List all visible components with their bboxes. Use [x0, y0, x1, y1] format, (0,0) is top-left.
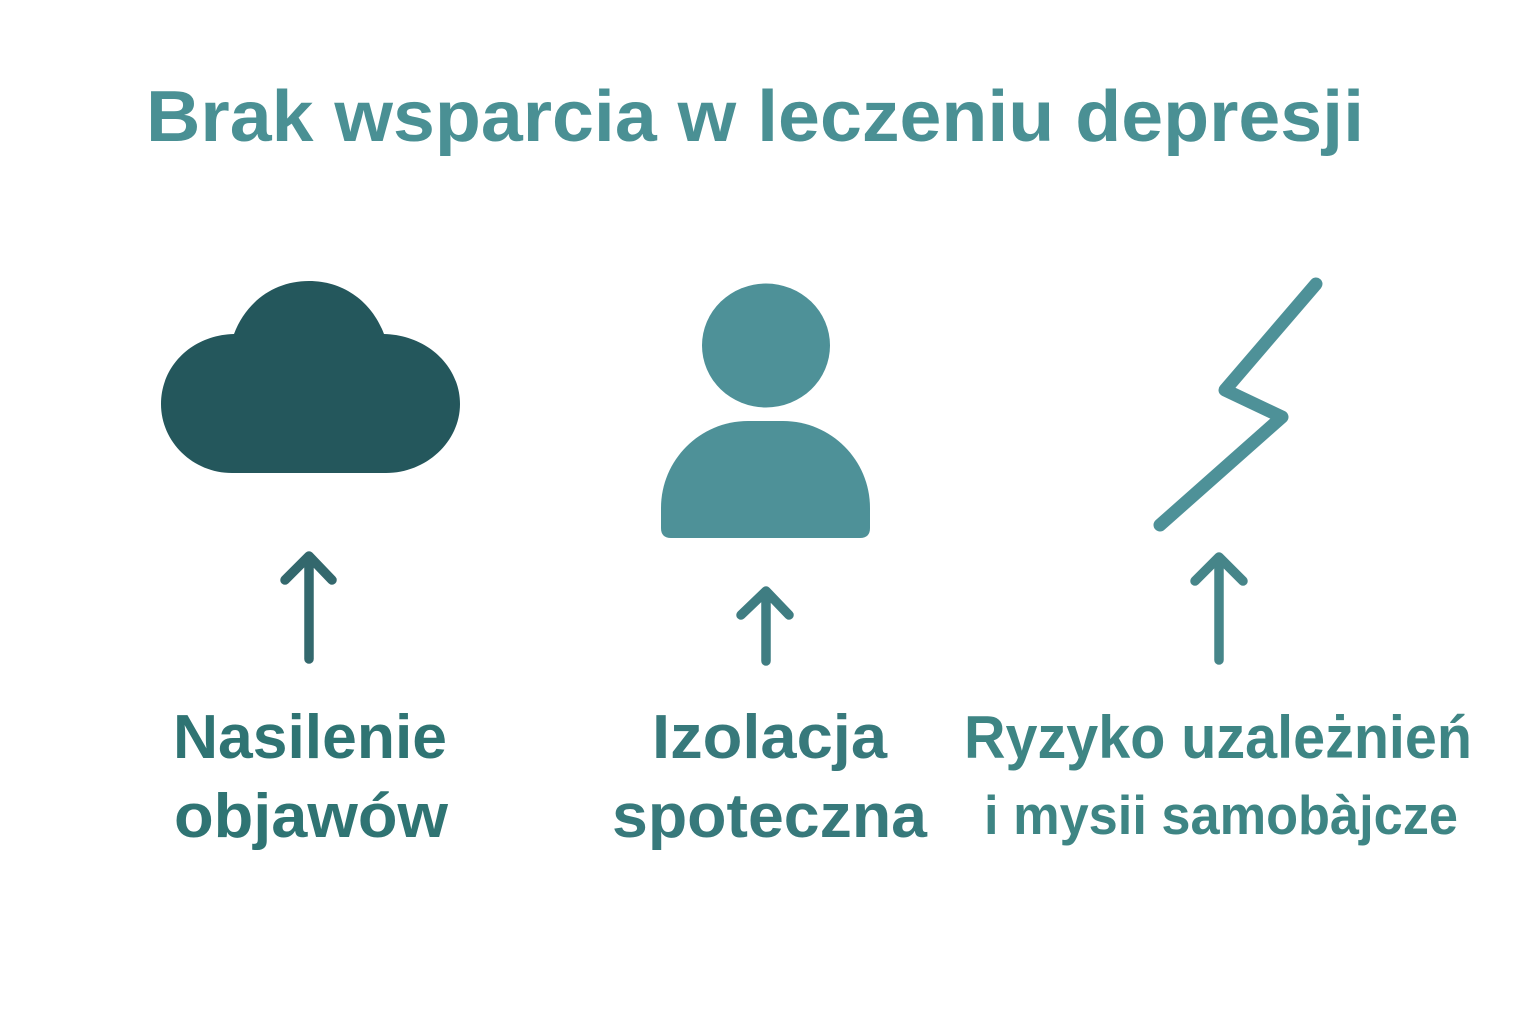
icon: dark cloud	[161, 281, 460, 473]
label: symptoms	[173, 703, 449, 851]
label: social isolation	[612, 703, 928, 851]
arrow: first column	[285, 556, 332, 659]
icon: lightning bolt	[1160, 284, 1316, 525]
label: symptoms: objawów	[174, 782, 449, 851]
title: Brak wsparcia w leczeniu depresji	[146, 77, 1364, 157]
arrow: third column	[1195, 557, 1243, 660]
label: addiction risk: Ryzyko uzależnień	[964, 704, 1472, 771]
label: social isolation: Izolacja	[652, 703, 888, 772]
label: addiction risk	[964, 704, 1472, 846]
label: social isolation: spoteczna	[612, 782, 928, 851]
icon: person	[661, 284, 870, 538]
label: symptoms: Nasilenie	[173, 703, 447, 772]
label: addiction risk: i mysii samobàjcze	[984, 784, 1458, 846]
arrow: second column	[741, 591, 789, 661]
